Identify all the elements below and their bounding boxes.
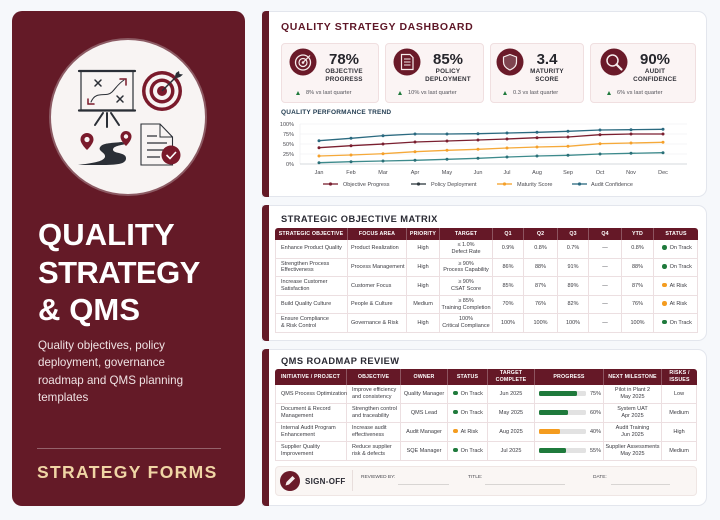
subtitle: templates: [38, 391, 88, 404]
table: strategic objective matrix: —: [602, 245, 608, 251]
series: audit confidence: [318, 151, 664, 164]
table: strategic objective matrix: On Track: [670, 320, 692, 326]
series: policy deployment: [318, 128, 664, 142]
main title: [38, 217, 200, 327]
card: maturity score: [490, 43, 584, 103]
table: strategic objective matrix: ≤ 1.0%: [457, 242, 475, 248]
main title: STRATEGY: [38, 254, 200, 290]
table: QMS roadmap: May 2025: [620, 394, 645, 400]
table: strategic objective matrix: —: [602, 283, 608, 289]
icon: shield: [496, 48, 524, 76]
table: strategic objective matrix: Governance & Risk: [351, 320, 398, 326]
trend up: [296, 91, 300, 95]
table: QMS roadmap: Internal Audit Program: [281, 425, 336, 431]
table: strategic objective matrix: 100%: [630, 320, 645, 326]
table: QMS roadmap: 60%: [590, 410, 601, 416]
table: strategic objective matrix: Q3: [569, 231, 577, 237]
metric: policy deployment: 85%: [433, 51, 463, 68]
metric: audit confidence: 90%: [640, 51, 670, 68]
table: strategic objective matrix: Q2: [537, 231, 544, 237]
table: strategic objective matrix: ≥ 90%: [458, 279, 474, 285]
metric label: POLICY: [436, 68, 460, 75]
table: QMS roadmap: At Risk: [461, 429, 478, 435]
table: QMS roadmap: Audit Manager: [406, 429, 442, 435]
icon: pen: [280, 471, 300, 491]
icon: checked document: [141, 124, 180, 165]
table: strategic objective matrix: 76%: [632, 301, 643, 307]
metric label: AUDIT: [645, 68, 665, 75]
table: strategic objective matrix: 100%: [459, 316, 473, 322]
table: strategic objective matrix: At Risk: [670, 283, 687, 289]
table: strategic objective matrix: 82%: [567, 301, 578, 307]
table: strategic objective matrix: CSAT Score: [451, 286, 481, 292]
trend up: [398, 91, 402, 95]
panel: quality strategy dashboard: [262, 11, 707, 197]
table: strategic objective matrix: On Track: [670, 245, 692, 251]
x axis labels: May: [442, 170, 452, 176]
x axis labels: Nov: [626, 170, 636, 176]
table: strategic objective matrix: Defect Rate: [451, 249, 481, 255]
table: strategic objective matrix: At Risk: [670, 301, 687, 307]
icon: objective target: [290, 48, 316, 76]
table: QMS roadmap: Increase audit: [352, 425, 387, 431]
table: QMS roadmap: Aug 2025: [499, 429, 523, 435]
metric label: SCORE: [535, 76, 559, 83]
field: title: TITLE:: [468, 475, 482, 480]
series: objective progress: [318, 132, 664, 149]
table: strategic objective matrix: Effectiveness: [281, 267, 314, 273]
table: QMS roadmap: ISSUES: [669, 377, 690, 383]
table: QMS roadmap: and traceability: [352, 413, 389, 419]
table: QMS roadmap: Improvement: [281, 451, 313, 457]
metric label: [530, 68, 564, 83]
table: strategic objective matrix: High: [417, 283, 429, 289]
table: QMS roadmap: On Track: [461, 448, 483, 454]
panel: strategic objective matrix: [262, 205, 707, 341]
table: QMS roadmap: On Track: [461, 391, 483, 397]
sign-off label: SIGN-OFF: [305, 477, 346, 486]
table: strategic objective matrix: —: [602, 264, 608, 270]
table: strategic objective matrix: Q4: [601, 231, 609, 237]
table: strategic objective matrix: Build Quality Culture: [281, 301, 331, 307]
table: QMS roadmap: Audit Training: [616, 425, 649, 431]
icon: strategy emblem: [49, 38, 207, 196]
metric label: [633, 68, 677, 83]
table: strategic objective matrix: FOCUS AREA: [359, 231, 395, 237]
table: strategic objective matrix: High: [417, 264, 429, 270]
table: QMS roadmap: Supplier Assessments: [605, 444, 660, 450]
table: QMS roadmap: risk & defects: [352, 451, 385, 457]
table: strategic objective matrix: 100%: [533, 320, 548, 326]
table: strategic objective matrix: 76%: [535, 301, 546, 307]
table: strategic objective matrix: YTD: [632, 231, 643, 237]
footer label: STRATEGY FORMS: [37, 462, 218, 482]
metric label: OBJECTIVE: [325, 68, 363, 75]
metric: maturity score: 3.4: [537, 51, 557, 68]
table: strategic objective matrix: Product Realization: [351, 245, 399, 251]
metric: objective progress: 78%: [329, 51, 359, 68]
y axis labels: [280, 122, 294, 168]
metric label: DEPLOYMENT: [425, 76, 471, 83]
table: strategic objective matrix: 0.9%: [502, 245, 514, 251]
table: strategic objective matrix: [275, 228, 698, 333]
table: QMS roadmap: INITIATIVE / PROJECT: [281, 374, 340, 380]
chart legend: Maturity Score: [517, 182, 552, 188]
table: QMS roadmap: 75%: [590, 391, 601, 397]
trend up: [503, 91, 507, 95]
table: strategic objective matrix: Satisfaction: [281, 286, 309, 292]
table: QMS roadmap: [275, 369, 697, 461]
trend up: [607, 91, 611, 95]
x axis labels: Aug: [532, 170, 542, 176]
table: strategic objective matrix: 91%: [567, 264, 578, 270]
table: strategic objective matrix: Customer Focus: [351, 283, 391, 289]
series: maturity score: [318, 141, 664, 158]
table: strategic objective matrix: 87%: [632, 283, 643, 289]
table: QMS roadmap: SQE Manager: [407, 448, 441, 454]
table: strategic objective matrix: Ensure Compliance: [281, 316, 329, 322]
table: strategic objective matrix: Training Completion: [441, 305, 490, 311]
table: strategic objective matrix: Medium: [413, 301, 433, 307]
table: QMS roadmap: Jun 2025: [621, 432, 644, 438]
table: strategic objective matrix: People & Culture: [351, 301, 393, 307]
table: QMS roadmap: and consistency: [352, 394, 391, 400]
x axis labels: Jan: [315, 170, 323, 176]
table: strategic objective matrix: —: [602, 320, 608, 326]
icon: magnifier: [600, 48, 628, 76]
table: QMS roadmap: Document & Record: [281, 406, 331, 412]
table: strategic objective matrix: STRATEGIC OBJECTIVE: [279, 231, 343, 237]
icon: target: [142, 71, 183, 111]
metric label: MATURITY: [530, 68, 564, 75]
main title: QUALITY: [38, 217, 175, 252]
table: strategic objective matrix: Increase Customer: [281, 279, 327, 285]
icon: roadmap: [78, 131, 132, 165]
y axis labels: 0%: [286, 162, 294, 168]
table: QMS roadmap: Reduce supplier: [352, 444, 392, 450]
delta text: 6% vs last quarter: [617, 90, 663, 96]
metric label: [325, 68, 363, 83]
table: QMS roadmap: May 2025: [499, 410, 523, 416]
icon: strategy board: [79, 71, 135, 127]
table: QMS roadmap: TARGET: [500, 370, 522, 376]
field: date: DATE:: [593, 475, 607, 480]
table: QMS roadmap: May 2025: [620, 451, 645, 457]
panel: QMS roadmap review: [262, 349, 707, 506]
heading: objective matrix: STRATEGIC OBJECTIVE MATRIX: [281, 214, 438, 224]
subtitle: deployment, governance: [38, 356, 165, 369]
table: strategic objective matrix: Q1: [504, 231, 512, 237]
card: policy deployment: [385, 43, 484, 103]
table: QMS roadmap: OWNER: [413, 374, 435, 380]
y axis labels: 75%: [283, 132, 294, 138]
table: QMS roadmap: 40%: [590, 429, 601, 435]
table: strategic objective matrix: High: [417, 320, 429, 326]
table: strategic objective matrix: 87%: [535, 283, 546, 289]
table: strategic objective matrix: Enhance Product Quality: [281, 245, 342, 251]
table: QMS roadmap: QMS Process Optimization: [281, 391, 347, 397]
subtitle: roadmap and QMS planning: [38, 374, 183, 387]
table: strategic objective matrix: Process Capability: [443, 267, 489, 273]
delta text: 0.3 vs last quarter: [513, 90, 558, 96]
y axis labels: 25%: [283, 152, 294, 158]
x axis labels: Jul: [503, 170, 511, 176]
table: strategic objective matrix: STATUS: [665, 231, 687, 237]
card: audit confidence: [590, 43, 696, 103]
table: strategic objective matrix: 85%: [502, 283, 514, 289]
table: QMS roadmap: Improve efficiency: [352, 387, 396, 393]
x axis labels: [315, 170, 668, 176]
table: strategic objective matrix: —: [602, 301, 608, 307]
metric label: CONFIDENCE: [633, 76, 677, 83]
table: QMS roadmap: Jun 2025: [500, 391, 522, 397]
table: QMS roadmap: 55%: [590, 448, 601, 454]
table: QMS roadmap: Enhancement: [281, 432, 315, 438]
table: strategic objective matrix: 88%: [535, 264, 546, 270]
table: QMS roadmap: effectiveness: [352, 432, 384, 438]
table: QMS roadmap: QMS Lead: [411, 410, 437, 416]
x axis labels: Sep: [563, 170, 573, 176]
table: strategic objective matrix: 100%: [566, 320, 580, 326]
card: objective progress: [281, 43, 379, 103]
table: strategic objective matrix: 0.8%: [631, 245, 644, 251]
x axis labels: Feb: [346, 170, 356, 176]
metric label: [425, 68, 471, 83]
heading: roadmap review: QMS ROADMAP REVIEW: [281, 356, 399, 366]
table: QMS roadmap: Supplier Quality: [281, 444, 320, 450]
table: QMS roadmap: COMPLETE: [496, 377, 526, 383]
x axis labels: Apr: [411, 170, 419, 176]
table: QMS roadmap: Management: [281, 413, 313, 419]
table: strategic objective matrix: 70%: [502, 301, 514, 307]
delta text: 8% vs last quarter: [306, 90, 352, 96]
table: strategic objective matrix: 89%: [567, 283, 578, 289]
table: QMS roadmap: PROGRESS: [553, 374, 585, 380]
heading: performance trend: QUALITY PERFORMANCE TREND: [281, 109, 391, 116]
table: strategic objective matrix: On Track: [670, 264, 692, 270]
table: QMS roadmap: Jul 2025: [501, 448, 521, 454]
table: strategic objective matrix: Critical Compliance: [442, 323, 490, 329]
chart legend: Policy Deployment: [431, 182, 477, 188]
table: strategic objective matrix: 0.7%: [567, 245, 579, 251]
table: QMS roadmap: RISKS /: [669, 370, 690, 376]
table: strategic objective matrix: High: [417, 245, 429, 251]
table: QMS roadmap: Medium: [669, 410, 689, 416]
table: strategic objective matrix: TARGET: [455, 231, 477, 237]
table: strategic objective matrix: Strengthen Process: [281, 261, 329, 267]
table: QMS roadmap: On Track: [461, 410, 483, 416]
subtitle: [38, 339, 183, 404]
table: strategic objective matrix: 0.8%: [534, 245, 547, 251]
table: QMS roadmap: Apr 2025: [621, 413, 644, 419]
icon: policy document: [394, 48, 420, 76]
table: QMS roadmap: Medium: [669, 448, 689, 454]
table: QMS roadmap: Low: [674, 391, 684, 397]
x axis labels: Oct: [596, 170, 605, 176]
panel: left cover: [12, 11, 245, 506]
metric label: PROGRESS: [325, 76, 363, 83]
table: QMS roadmap: System UAT: [617, 406, 648, 412]
table: QMS roadmap: OBJECTIVE: [358, 374, 389, 380]
table: strategic objective matrix: ≥ 85%: [458, 298, 474, 304]
y axis labels: 50%: [283, 142, 294, 148]
table: strategic objective matrix: ≥ 90%: [458, 261, 474, 267]
line chart: quality performance trend: [280, 122, 687, 188]
table: QMS roadmap: STATUS: [457, 374, 478, 380]
table: strategic objective matrix: 88%: [632, 264, 643, 270]
chart legend: Objective Progress: [343, 182, 390, 188]
table: QMS roadmap: High: [673, 429, 685, 435]
subtitle: Quality objectives, policy: [38, 339, 165, 352]
table: strategic objective matrix: & Risk Control: [281, 323, 316, 329]
chart legend: [323, 182, 633, 188]
table: strategic objective matrix: Process Management: [351, 264, 404, 270]
table: QMS roadmap: NEXT MILESTONE: [608, 374, 657, 380]
x axis labels: Dec: [658, 170, 668, 176]
sign-off bar: [275, 466, 697, 496]
field: reviewed by: REVIEWED BY:: [361, 475, 395, 480]
delta text: 10% vs last quarter: [408, 90, 457, 96]
main title: & QMS: [38, 292, 140, 327]
x axis labels: Jun: [474, 170, 482, 176]
table: QMS roadmap: Quality Manager: [404, 391, 444, 397]
x axis labels: Mar: [378, 170, 388, 176]
table: strategic objective matrix: 86%: [502, 264, 514, 270]
table: strategic objective matrix: 100%: [501, 320, 515, 326]
y axis labels: 100%: [280, 122, 294, 128]
table: QMS roadmap: Strengthen control: [352, 406, 397, 412]
chart legend: Audit Confidence: [591, 182, 633, 188]
table: strategic objective matrix: PRIORITY: [410, 231, 436, 237]
table: QMS roadmap: Pilot in Plant 2: [615, 387, 650, 393]
heading: dashboard: QUALITY STRATEGY DASHBOARD: [281, 21, 473, 33]
